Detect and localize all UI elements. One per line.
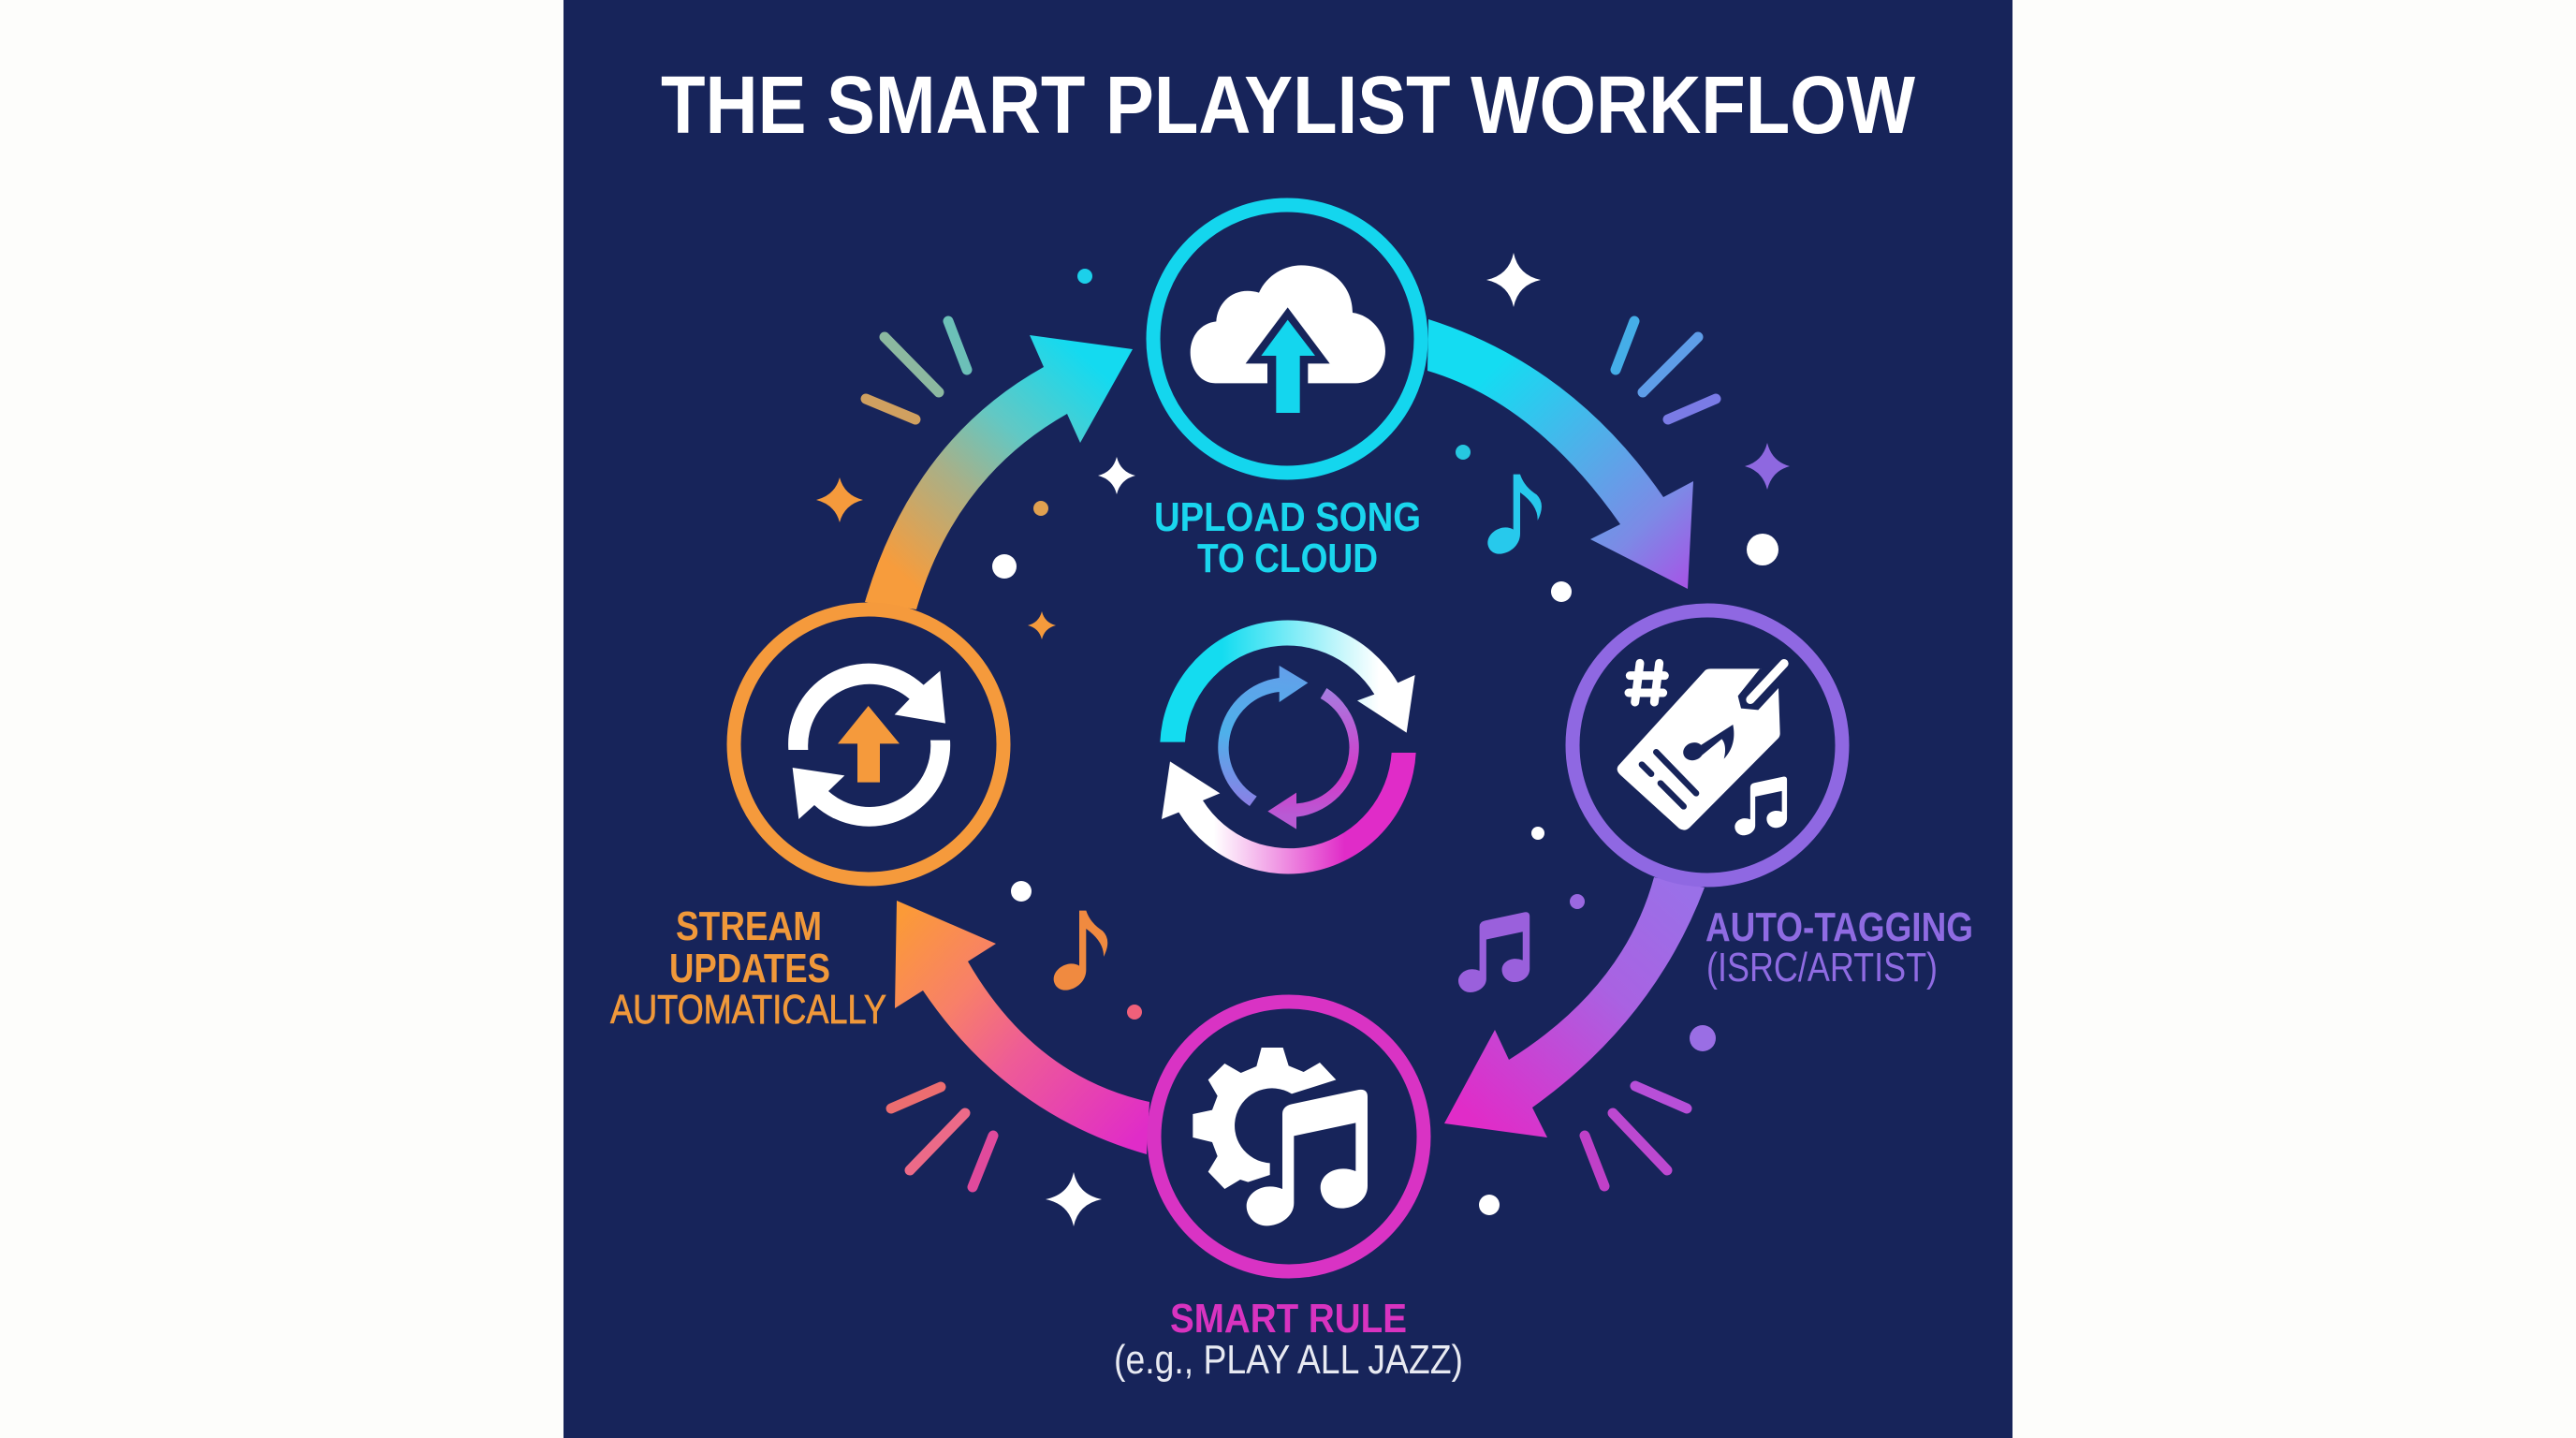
node ring: orange (734, 609, 1003, 879)
arrow: smart rule to stream updates (895, 901, 1149, 1154)
label: stream updates automatically: AUTOMATICALLY (610, 987, 886, 1033)
node ring: purple (1573, 610, 1842, 880)
node: upload song to cloud (1153, 205, 1421, 473)
icon: purple double music note (1458, 912, 1530, 992)
icon: central cycle arrows (1160, 620, 1416, 873)
burst lines: bottom right (1585, 1086, 1687, 1186)
arrow: auto-tagging to smart rule (1444, 877, 1705, 1137)
burst lines: bottom left (891, 1087, 993, 1187)
label: stream updates automatically (610, 903, 886, 1033)
label: auto-tagging (1705, 904, 1973, 990)
arrow: upload to auto-tagging (1427, 319, 1693, 589)
burst lines: top right (1616, 321, 1716, 419)
node: auto-tagging (1573, 610, 1842, 880)
panel: navy background (564, 0, 2012, 1438)
node ring: magenta (1154, 1002, 1424, 1271)
label: smart rule (1114, 1296, 1463, 1383)
icon: cloud with upload arrow (1191, 265, 1385, 413)
title: THE SMART PLAYLIST WORKFLOW (661, 60, 1916, 151)
label: upload song to cloud: TO CLOUD (1197, 536, 1378, 581)
burst lines: top left (866, 321, 967, 419)
scattered dots (992, 269, 1778, 1215)
label: smart rule: SMART RULE (1170, 1296, 1407, 1342)
node ring: cyan (1153, 205, 1421, 473)
sparkle stars (816, 253, 1790, 1226)
label: smart rule: (e.g., PLAY ALL JAZZ) (1114, 1337, 1463, 1383)
icon: gear and music note (1193, 1048, 1368, 1225)
arrow: stream updates to upload (865, 335, 1133, 609)
node: smart rule (1154, 1002, 1424, 1271)
node: stream updates (734, 609, 1003, 879)
label: upload song to cloud: UPLOAD SONG (1154, 494, 1421, 540)
label: stream updates automatically: UPDATES (669, 946, 830, 991)
icon: orange music note (1054, 911, 1107, 990)
icon: music tag (1617, 663, 1787, 835)
label: stream updates automatically: STREAM (676, 903, 822, 949)
icon: sync arrows with upload arrow (788, 664, 950, 827)
label: upload song to cloud (1154, 494, 1421, 581)
icon: cyan music note (1487, 475, 1542, 554)
label: auto-tagging: (ISRC/ARTIST) (1706, 945, 1938, 990)
label: auto-tagging: AUTO-TAGGING (1705, 904, 1973, 950)
